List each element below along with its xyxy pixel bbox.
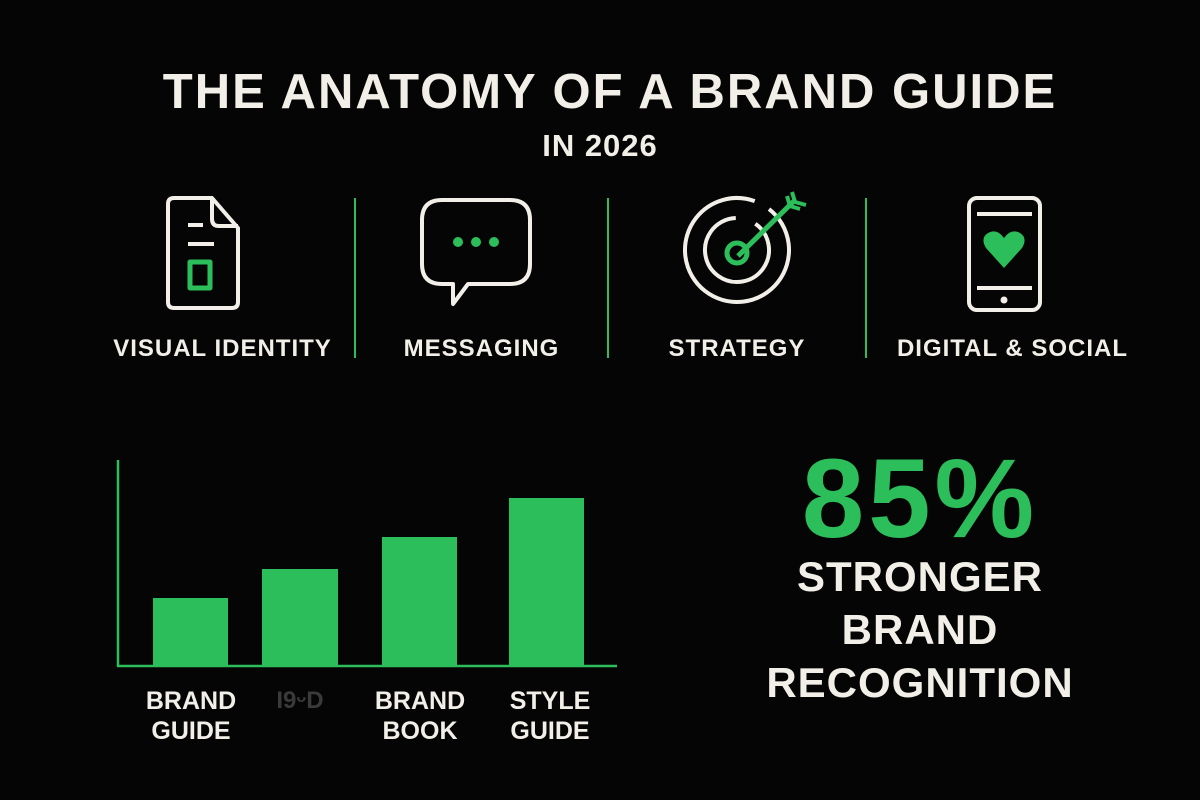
icon: speech bubble [422, 200, 530, 304]
title: THE ANATOMY OF A BRAND GUIDE [163, 65, 1057, 119]
bar chart [117, 460, 617, 667]
chart labels: BRAND [146, 687, 236, 715]
icon: document [168, 198, 238, 308]
icon: phone [969, 198, 1040, 310]
text: STYLE [510, 687, 590, 715]
text: BRAND [842, 606, 998, 653]
text: BOOK [382, 717, 458, 745]
subtitle: IN 2026 [542, 128, 658, 163]
text: DIGITAL & SOCIAL [897, 335, 1128, 362]
stat callout: 85% [802, 436, 1038, 561]
icon labels: VISUAL IDENTITY [113, 335, 332, 362]
text: GUIDE [510, 717, 590, 745]
text: BRAND [375, 687, 465, 715]
text: I9ᵕD [276, 687, 324, 714]
text: STRATEGY [669, 335, 805, 362]
chart labels: GUIDE [151, 717, 231, 745]
text: RECOGNITION [766, 659, 1074, 706]
icon: target [664, 177, 810, 323]
dividers [355, 198, 866, 358]
chart labels [146, 687, 236, 745]
text: STRONGER [797, 553, 1043, 600]
text: MESSAGING [404, 335, 559, 362]
